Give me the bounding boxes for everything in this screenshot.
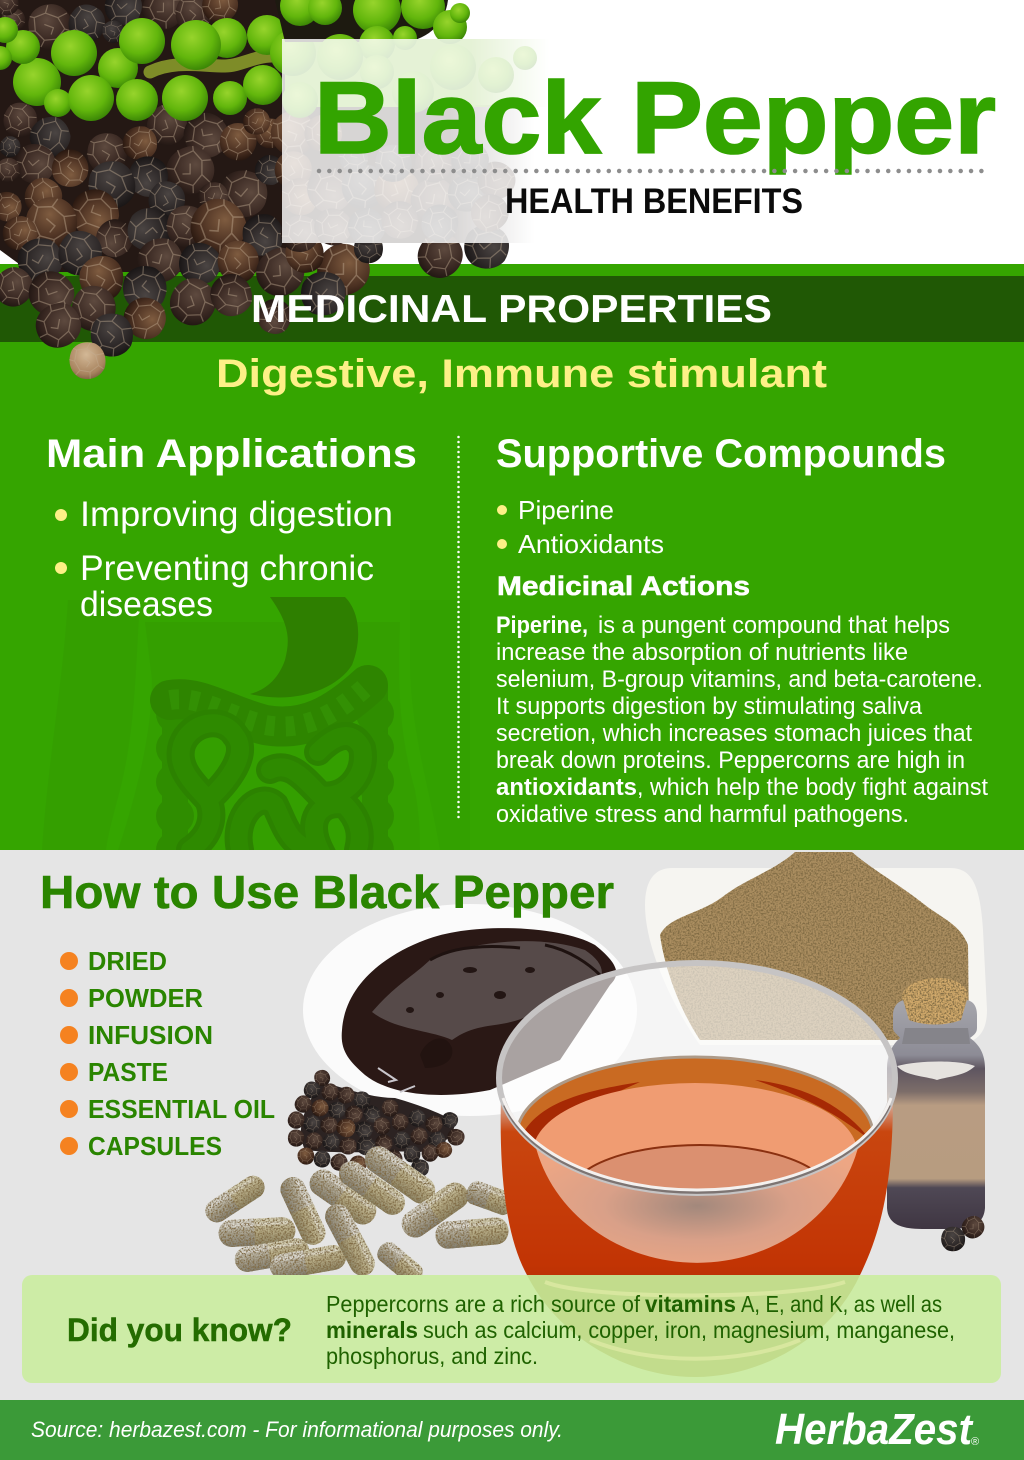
panel: main applications xyxy=(46,432,417,624)
callout: did you know xyxy=(22,1275,1001,1383)
image: glass bowl with infusion xyxy=(496,960,898,1275)
heading: main applications: Main Applications xyxy=(46,432,417,476)
source note: Source: herbazest.com - For informational purposes only. xyxy=(31,1417,563,1442)
callout text: such as calcium, copper, iron, magnesium, manganese, xyxy=(423,1317,955,1343)
heading: medicinal actions: Medicinal Actions xyxy=(497,571,750,601)
logo: HerbaZest: HerbaZest xyxy=(775,1405,974,1454)
item: powder: POWDER xyxy=(88,983,203,1013)
bullet: improving digestion: Improving digestion xyxy=(80,495,393,534)
item: capsules: CAPSULES xyxy=(88,1131,222,1161)
text block: medicinal actions: , which help the body fight against xyxy=(637,774,988,801)
subtitle: HEALTH BENEFITS xyxy=(505,182,803,221)
callout text: minerals xyxy=(326,1317,418,1343)
title: Black Pepper xyxy=(314,61,996,175)
illustration: digestive system xyxy=(42,597,470,850)
callout text: phosphorus, and zinc. xyxy=(326,1343,538,1369)
heading: medicinal properties: MEDICINAL PROPERTIES xyxy=(251,288,772,331)
bullet: preventing chronic diseases: Preventing chronic xyxy=(80,549,374,588)
glass interior xyxy=(499,963,895,1193)
callout text: vitamins xyxy=(645,1291,736,1317)
bowl body with liquid xyxy=(501,1095,893,1377)
heading: how to use black pepper: How to Use Black Pepper xyxy=(40,866,614,918)
title panel xyxy=(282,39,1024,243)
text block: medicinal actions: selenium, B-group vitamins, and beta-carotene. xyxy=(496,666,983,693)
bullet: preventing chronic diseases xyxy=(55,549,374,624)
callout text xyxy=(326,1291,955,1369)
panel: supportive compounds xyxy=(496,432,988,828)
subheading: digestive, immune stimulant: Digestive, Immune stimulant xyxy=(216,352,827,396)
dark band: medicinal properties xyxy=(0,276,1024,342)
gray usage section background xyxy=(0,850,1024,1400)
text block: medicinal actions: Piperine, xyxy=(496,612,588,639)
item: paste: PASTE xyxy=(88,1057,168,1087)
text block: medicinal actions: break down proteins. Peppercorns are high in xyxy=(496,747,965,774)
bullet: preventing chronic diseases: diseases xyxy=(80,585,213,624)
callout text: Peppercorns are a rich source of xyxy=(326,1291,640,1317)
image: capsules xyxy=(201,1141,517,1288)
item: dried: DRIED xyxy=(88,946,167,976)
bullet: antioxidants: Antioxidants xyxy=(518,529,664,559)
item: infusion: INFUSION xyxy=(88,1020,213,1050)
text block: medicinal actions: It supports digestion by stimulating saliva xyxy=(496,693,923,720)
image: paste bowl xyxy=(303,904,637,1116)
bullet: piperine: Piperine xyxy=(518,495,614,525)
image: essential oil bottle xyxy=(887,978,987,1255)
glass rim xyxy=(499,963,895,1193)
green medicinal section background xyxy=(0,264,1024,850)
image: powder bowl xyxy=(645,852,987,1045)
text block: medicinal actions: increase the absorption of nutrients like xyxy=(496,639,908,666)
text block: medicinal actions xyxy=(496,612,988,828)
text block: medicinal actions: secretion, which increases stomach juices that xyxy=(496,720,972,747)
item: essential oil: ESSENTIAL OIL xyxy=(88,1094,275,1124)
image: peppercorn pile xyxy=(284,1070,468,1180)
footer xyxy=(0,1400,1024,1460)
logo: HerbaZest: ® xyxy=(971,1436,979,1448)
text block: medicinal actions: is a pungent compound that helps xyxy=(598,612,950,639)
callout text: A, E, and K, as well as xyxy=(741,1291,942,1317)
text block: medicinal actions: antioxidants xyxy=(496,774,637,801)
liquid surface xyxy=(518,1056,873,1188)
text block: medicinal actions: oxidative stress and harmful pathogens. xyxy=(496,801,909,828)
heading: supportive compounds: Supportive Compounds xyxy=(496,432,946,476)
image: black and green peppercorns xyxy=(0,0,555,383)
callout heading: Did you know? xyxy=(67,1312,292,1348)
list: forms of use xyxy=(60,946,275,1161)
